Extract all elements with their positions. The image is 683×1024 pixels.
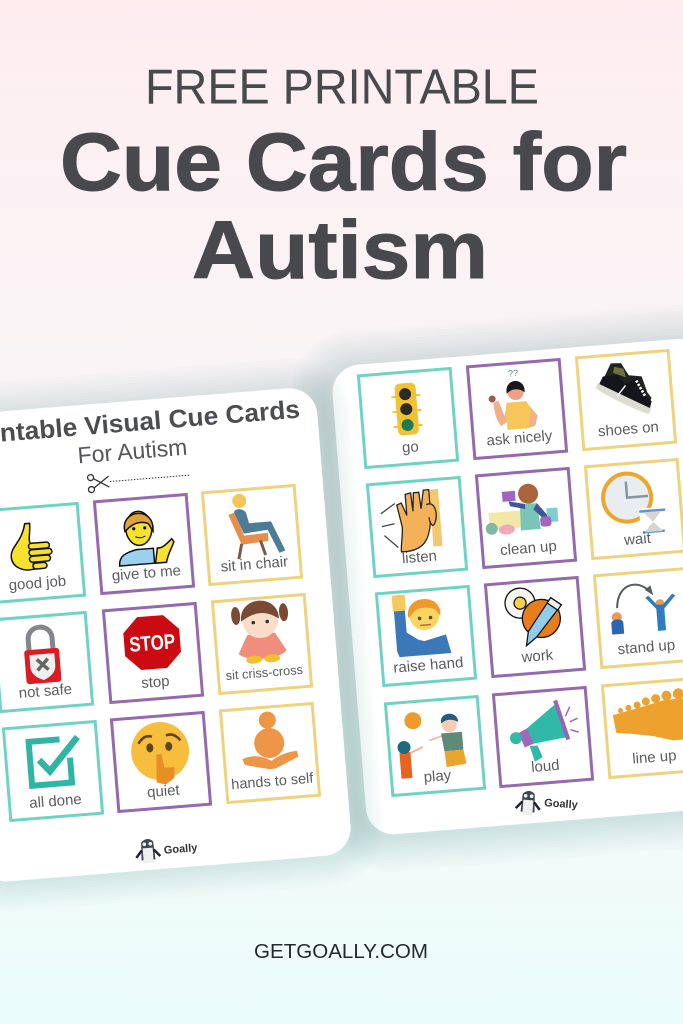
icon: megaphone [507,698,581,764]
icon: thumbs up [9,522,53,571]
label: listen [401,548,438,567]
icon: child asking: ?? [508,368,519,379]
card: stop [103,603,203,703]
icon: child with toys [482,482,559,536]
label: not safe [18,681,73,702]
icon: sit to stand figures [608,581,678,635]
label: wait [622,530,652,549]
logo: goally [515,790,579,818]
icon: black sneakers [595,358,664,416]
card: not safe [0,612,93,712]
card: sit in chair [202,485,302,585]
icon: person gesturing [115,509,176,566]
icon: shushing face [129,720,192,787]
title: cue cards for: Cue Cards for [60,117,627,208]
label: sit criss-cross [225,662,304,683]
label: all done [29,791,82,812]
title: autism: Autism [192,205,488,296]
icon: stop sign: STOP [128,630,176,657]
label: stand up [617,637,676,658]
label: clean up [499,538,557,559]
icon: clock and hourglass [601,471,669,539]
icon: seated figure [239,709,299,771]
card: go [358,368,458,468]
icon: traffic light [390,382,423,436]
label: give to me [111,562,182,585]
card: loud [493,687,593,787]
panel: left card sheet [0,354,389,916]
icon: scissors and cut line [87,467,190,493]
card: give to me [94,494,194,594]
icon: person on chair [227,491,286,560]
icon: line of people [611,688,683,745]
card: wait [585,459,683,559]
label: hands to self [231,771,315,793]
card: line up [602,678,683,778]
card: stand up [594,568,683,668]
label: sit in chair [220,553,289,576]
label: loud [531,757,560,776]
label: play [423,767,452,786]
icon: check box [29,737,81,786]
icon: children playing ball [395,708,467,779]
icon: person raising hand [392,591,451,657]
label: work [520,647,554,666]
icon: hand behind ear [379,489,443,553]
card: raise hand [376,586,476,686]
logo: goally [135,835,199,864]
footer url: GETGOALLY.COM [254,940,428,963]
label: go [401,438,419,457]
panel: right card sheet [286,300,683,877]
card: work [485,577,585,677]
label: quiet [146,782,181,801]
sheet subheading: For Autism [77,434,188,468]
logo: goally: Goally [544,797,579,812]
card: ask nicely [467,359,567,459]
card: all done [3,721,103,821]
label: good job [8,573,67,594]
label: ask nicely [486,427,553,450]
card: listen [367,477,467,577]
label: raise hand [393,654,464,677]
card: play [385,696,485,796]
label: line up [632,747,677,768]
label: stop [141,673,170,692]
card: shoes on [576,350,676,450]
icon: girl sitting [230,598,292,665]
icon: red padlock [22,626,62,684]
card: quiet [111,712,211,812]
heading: free printable: FREE PRINTABLE [145,60,539,114]
logo: goally: Goally [163,842,199,857]
card: sit criss-cross [212,594,312,694]
card: clean up [476,468,576,568]
label: shoes on [597,418,659,440]
icon: light bulb and pencil [504,585,564,647]
card: good job [0,503,85,603]
card: hands to self [220,703,320,803]
